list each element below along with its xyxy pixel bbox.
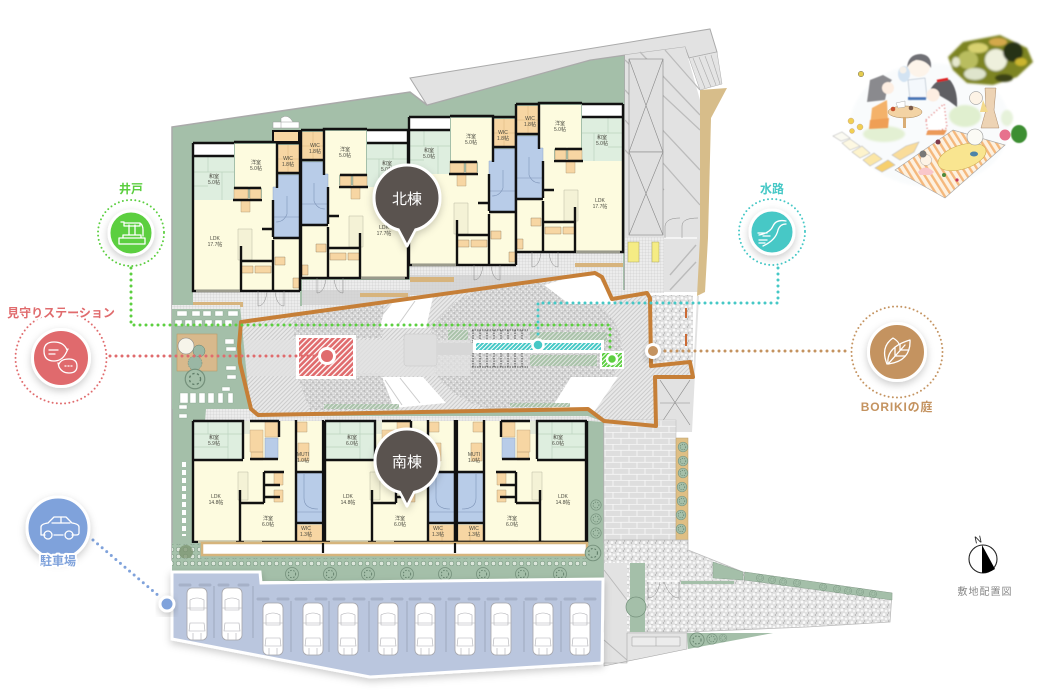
south room labels: LDK xyxy=(343,494,354,500)
south room labels: 1.3帖 xyxy=(300,531,312,538)
unit 2 xyxy=(325,420,455,553)
north room labels: 5.0帖 xyxy=(596,140,608,147)
icon: car xyxy=(41,517,79,539)
south room labels: LDK xyxy=(211,494,222,500)
party wall xyxy=(454,420,456,553)
north room labels: 5.0帖 xyxy=(465,139,477,146)
marker: waterway bar xyxy=(473,340,604,353)
north room labels: 5.0帖 xyxy=(250,165,262,172)
east gravel with orange benches xyxy=(650,295,699,432)
connector: boriki garden xyxy=(665,350,851,352)
north room labels: WIC xyxy=(310,143,320,149)
north room labels: 洋室 xyxy=(555,120,565,127)
dot: station xyxy=(320,348,334,364)
table xyxy=(888,106,922,118)
north room labels: 5.0帖 xyxy=(208,179,220,186)
north room labels: LDK xyxy=(210,236,221,242)
courtyard xyxy=(242,275,690,420)
car stop marks xyxy=(180,585,595,599)
icon: well pump xyxy=(119,222,145,244)
stepping stones xyxy=(833,132,919,172)
south room labels: 6.0帖 xyxy=(346,440,358,447)
unit 1 door xyxy=(273,116,299,128)
callout: waterway xyxy=(739,181,805,265)
north room labels: LDK xyxy=(379,225,390,231)
illustration: family picnic under a tree xyxy=(833,35,1033,198)
unit 1 entry xyxy=(273,131,299,142)
callout: parking xyxy=(27,497,89,568)
cars xyxy=(187,588,207,640)
south room labels: 6.0帖 xyxy=(262,521,274,528)
south room labels: 洋室 xyxy=(507,515,517,522)
north room labels: 1.8帖 xyxy=(309,148,321,155)
north room labels: 和室 xyxy=(209,173,219,180)
callout: boriki garden xyxy=(852,306,942,414)
connector: parking xyxy=(93,540,160,597)
callout: mimamori station: 見守りステーション xyxy=(7,305,115,320)
icon: waterway xyxy=(758,221,786,246)
pin: south wing: 南棟 xyxy=(392,454,422,471)
caption: 敷地配置図 xyxy=(958,585,1012,598)
north room labels: 17.7帖 xyxy=(208,241,222,248)
north room labels: WIC xyxy=(525,116,535,122)
south room labels: 14.8帖 xyxy=(556,499,570,506)
callout: mimamori station xyxy=(7,305,115,404)
north room labels: 5.0帖 xyxy=(554,126,566,133)
ground below north wing xyxy=(193,252,650,330)
south room labels: 6.0帖 xyxy=(506,521,518,528)
south room labels xyxy=(208,434,570,538)
marker: well area xyxy=(600,351,624,369)
picnic mat xyxy=(895,130,1005,198)
south room labels: 1.0帖 xyxy=(468,457,480,464)
dot: waterway xyxy=(532,340,544,350)
unit 2 xyxy=(301,129,408,293)
north room labels: WIC xyxy=(283,156,293,162)
callout: boriki garden: BORIKIの庭 xyxy=(861,399,933,414)
unit 3 xyxy=(409,116,516,280)
north room labels: 5.0帖 xyxy=(423,153,435,160)
ball and leaf xyxy=(1000,130,1010,140)
north room labels: 1.8帖 xyxy=(497,135,509,142)
unit 1 xyxy=(193,420,323,553)
person: mother with baby xyxy=(898,54,931,100)
north room labels: 和室 xyxy=(424,147,434,154)
north wing xyxy=(193,103,623,306)
north room labels: 17.7帖 xyxy=(593,203,607,210)
parking xyxy=(172,572,603,677)
grass xyxy=(863,126,905,142)
north room labels xyxy=(208,116,608,248)
person: girl in orange xyxy=(867,75,894,129)
west garden xyxy=(172,305,250,418)
connector: well xyxy=(131,268,610,350)
south room labels: WIC xyxy=(301,526,311,532)
north room labels: 洋室 xyxy=(466,133,476,140)
south room labels: MUTI xyxy=(468,452,480,458)
dot: boriki xyxy=(646,344,660,358)
tree canopy xyxy=(948,35,1033,85)
south room labels: WIC xyxy=(433,526,443,532)
compass: N xyxy=(974,534,983,547)
north room labels: 洋室 xyxy=(340,146,350,153)
north room labels: 和室 xyxy=(382,160,392,167)
south wing xyxy=(193,420,587,553)
south room labels: 6.0帖 xyxy=(552,440,564,447)
north room labels: 和室 xyxy=(597,134,607,141)
south room labels: 14.8帖 xyxy=(341,499,355,506)
gold strip xyxy=(697,88,727,296)
person: girl in dotted dress xyxy=(926,79,957,135)
marker: mimamori station area xyxy=(296,335,356,379)
south room labels: 洋室 xyxy=(263,515,273,522)
south room labels: 14.8帖 xyxy=(209,499,223,506)
courtyard outline xyxy=(239,273,693,426)
unit 3 xyxy=(457,420,587,553)
dot: well xyxy=(607,354,617,364)
connector: station xyxy=(110,354,320,358)
south planting strip xyxy=(172,462,604,581)
south room labels: MUTI xyxy=(297,452,309,458)
unit 1 xyxy=(193,142,300,306)
site plan xyxy=(172,29,892,677)
north room labels: 5.0帖 xyxy=(339,152,351,159)
tree trunk xyxy=(981,88,999,128)
callout: parking: 駐車場 xyxy=(40,553,76,568)
icon: chat bubbles xyxy=(44,342,77,373)
pin: south wing xyxy=(375,429,439,506)
compass xyxy=(969,534,997,573)
southeast entrance xyxy=(604,420,892,666)
ground below courtyard xyxy=(205,409,604,422)
unit 4 xyxy=(516,103,623,267)
pin: north wing xyxy=(374,165,440,246)
north room labels: 5.0帖 xyxy=(381,166,393,173)
south room labels: 洋室 xyxy=(395,515,405,522)
connector: waterway xyxy=(538,268,778,340)
road strip xyxy=(410,29,717,105)
north room labels: 17.7帖 xyxy=(377,230,391,237)
south room labels: 5.9帖 xyxy=(208,440,220,447)
north room labels: WIC xyxy=(498,130,508,136)
callout: waterway: 水路 xyxy=(760,181,784,196)
north room labels: 1.8帖 xyxy=(524,121,536,128)
pin: north wing: 北棟 xyxy=(392,191,422,208)
south room labels: 和室 xyxy=(209,434,219,441)
south room labels: 1.0帖 xyxy=(297,457,309,464)
dot: parking xyxy=(160,597,174,611)
south room labels: 6.0帖 xyxy=(394,521,406,528)
south room labels: 和室 xyxy=(553,434,563,441)
green perimeter xyxy=(172,55,625,560)
south room labels: 和室 xyxy=(347,434,357,441)
south room labels: 1.3帖 xyxy=(432,531,444,538)
callout: well xyxy=(98,181,164,266)
north room labels: 洋室 xyxy=(251,159,261,166)
south room labels: 1.3帖 xyxy=(468,531,480,538)
east service area xyxy=(625,47,727,296)
icon: leaf xyxy=(885,338,910,364)
butterflies xyxy=(858,71,864,77)
south room labels: WIC xyxy=(469,526,479,532)
north room labels: LDK xyxy=(595,198,606,204)
north room labels: 1.8帖 xyxy=(282,161,294,168)
south room labels: LDK xyxy=(558,494,569,500)
callout: well: 井戸 xyxy=(119,181,143,196)
